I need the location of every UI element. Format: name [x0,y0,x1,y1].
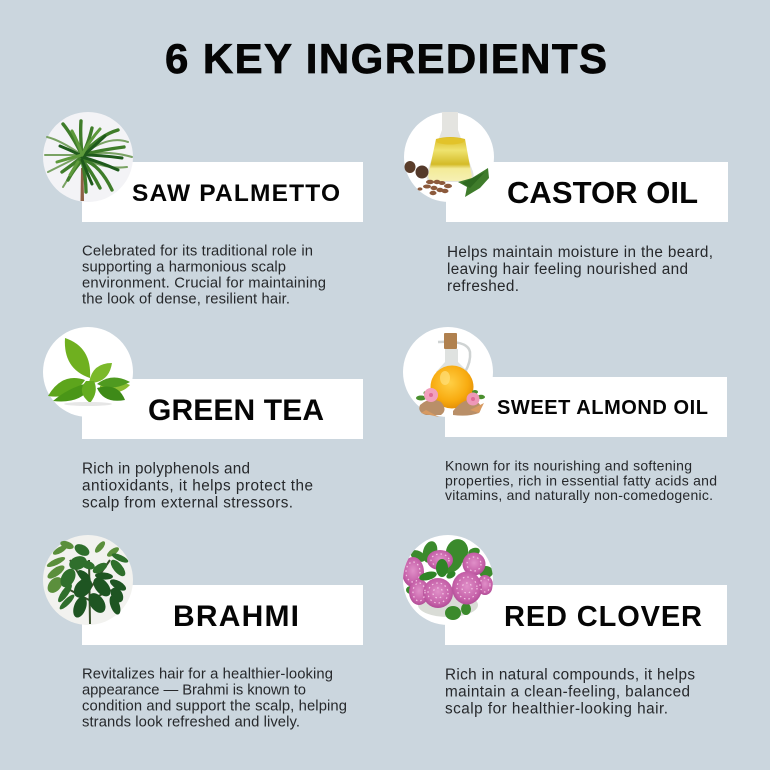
description: castor oil [447,244,713,295]
description: brahmi [82,667,347,731]
heading card: green tea [82,379,363,439]
icon: flask with castor beans [404,112,494,202]
heading card: green tea: GREEN TEA [148,394,324,427]
heading card: saw palmetto: SAW PALMETTO [132,180,340,207]
description: red clover: scalp for healthier-looking hair. [445,700,668,717]
panel: brahmi [43,535,363,731]
heading card: brahmi: BRAHMI [173,600,299,633]
description: green tea: scalp from external stressors. [82,495,293,512]
description: brahmi: appearance — Brahmi is known to [82,683,306,699]
description: saw palmetto: environment. Crucial for maintaining [82,276,326,292]
description: red clover: Rich in natural compounds, it helps [445,667,695,684]
heading card: castor oil [446,162,728,222]
icon: tea leaves [43,327,133,417]
heading card: sweet almond oil [445,377,727,437]
description: saw palmetto [82,244,326,308]
description: saw palmetto: supporting a harmonious scalp [82,260,286,276]
description: sweet almond oil: Known for its nourishing and softening [445,458,692,474]
description: castor oil: leaving hair feeling nourished and [447,261,688,278]
panel: green tea [43,327,363,512]
description: green tea: Rich in polyphenols and [82,461,250,478]
description: sweet almond oil [445,458,717,503]
heading card: sweet almond oil: SWEET ALMOND OIL [497,397,708,419]
icon: almond oil bottle [403,327,493,417]
description: brahmi: Revitalizes hair for a healthier-looking [82,667,333,683]
description: brahmi: condition and support the scalp, helping [82,699,347,715]
icon: brahmi plant [43,535,133,625]
panel: saw palmetto [43,112,363,308]
heading card: brahmi [82,585,363,645]
description: saw palmetto: the look of dense, resilient hair. [82,292,290,308]
panel: red clover [402,535,727,717]
description: sweet almond oil: vitamins, and naturally non-comedogenic. [445,487,713,503]
description: castor oil: refreshed. [447,278,519,295]
heading card: castor oil: CASTOR OIL [507,175,698,210]
description: brahmi: strands look refreshed and lively. [82,715,300,731]
title: 6 KEY INGREDIENTS [165,35,607,82]
panel: castor oil [404,112,728,295]
panel: sweet almond oil [403,327,727,503]
icon: palm tree [43,112,133,202]
icon: red clover blossoms [402,535,493,625]
heading card: saw palmetto [82,162,363,222]
description: green tea [82,461,313,512]
description: red clover: maintain a clean-feeling, balanced [445,684,690,701]
description: saw palmetto: Celebrated for its traditional role in [82,244,313,260]
description: red clover [445,667,695,717]
heading card: red clover [445,585,727,645]
description: green tea: antioxidants, it helps protect the [82,478,313,495]
description: sweet almond oil: properties, rich in essential fatty acids and [445,472,717,488]
heading card: red clover: RED CLOVER [504,601,702,633]
description: castor oil: Helps maintain moisture in the beard, [447,244,713,261]
